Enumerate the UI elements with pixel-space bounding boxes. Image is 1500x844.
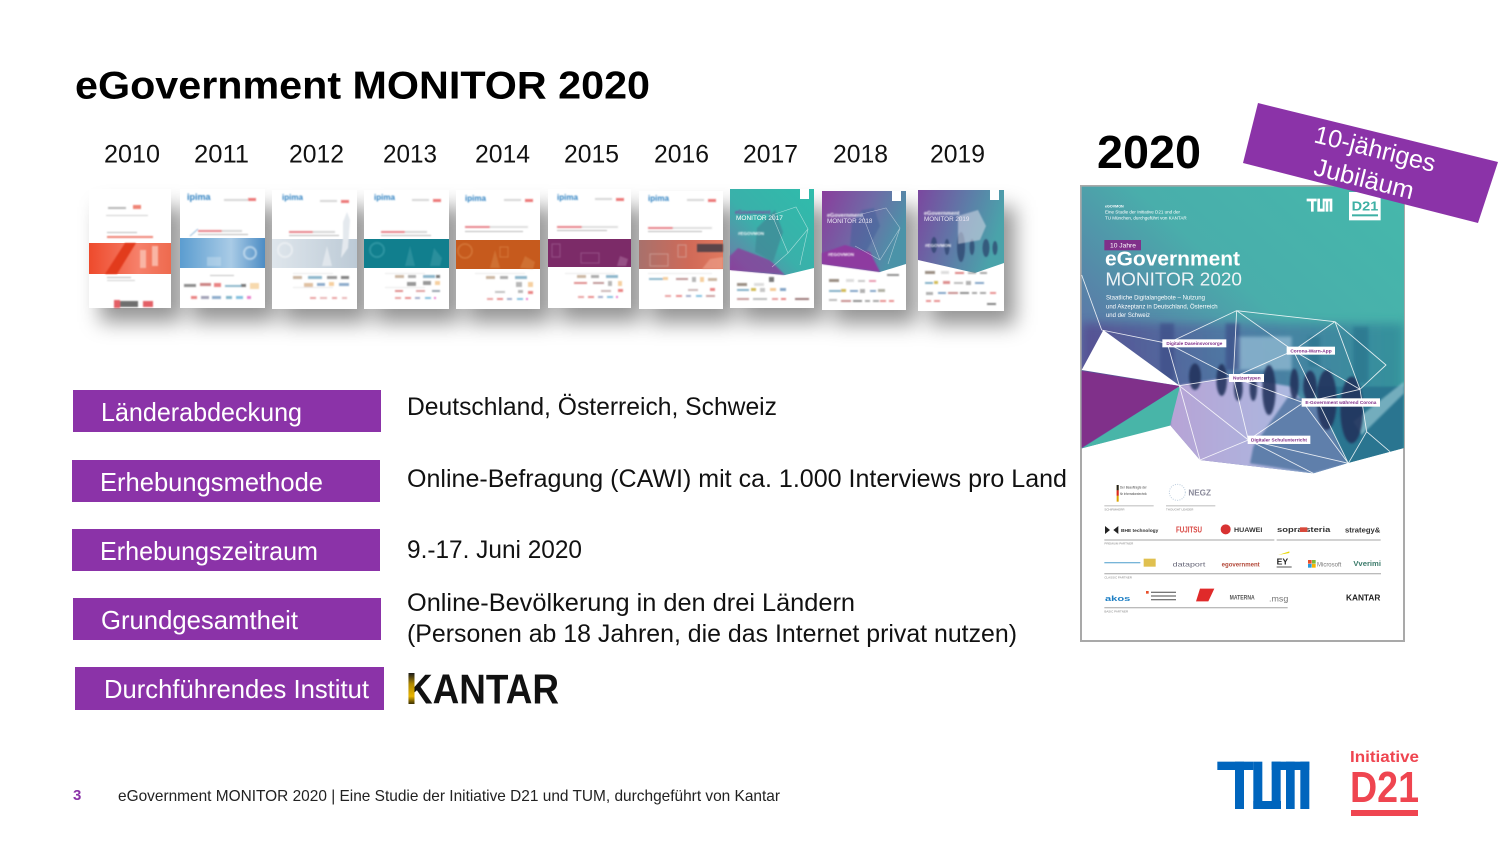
cover 2014: ipima [465, 194, 486, 203]
cover partner logos: strategy& [1345, 525, 1381, 534]
Initiative D21 logo: Initiative [1350, 749, 1419, 766]
cover topic labels: Digitaler Schulunterricht [1251, 437, 1308, 442]
footer text: eGovernment MONITOR 2020 | Eine Studie der Initiative D21 und TUM, durchgeführt von Kantar [118, 788, 781, 805]
cover 2010 [89, 189, 171, 308]
cover partner logos: PREMIUM PARTNER [1104, 541, 1134, 545]
cover topic labels [1162, 339, 1380, 444]
cover top text: und der Schweiz [1106, 312, 1150, 319]
cover 2012: ipima [282, 193, 303, 202]
cover 2018 [822, 191, 906, 310]
cover 2013: ipima [374, 193, 395, 202]
cover partner logos [1104, 484, 1381, 614]
cover partner logos: .msg [1269, 594, 1288, 603]
cover 2017: MONITOR 2017 [736, 215, 783, 222]
year labels [104, 140, 985, 168]
cover 2019: #EGOVMON [925, 243, 951, 248]
row: Grundgesamtheit [73, 589, 1017, 648]
large cover 2020 [1081, 186, 1404, 641]
cover top text: eGovernment [1105, 249, 1240, 271]
cover 2015: ipima [557, 193, 578, 202]
cover 2019: eGovernment [924, 211, 960, 217]
row: Durchführendes Institut [75, 666, 559, 712]
cover D21 logo [1349, 192, 1381, 220]
row: Länderabdeckung: Länderabdeckung [101, 397, 302, 427]
cover top text: 10 Jahre [1110, 242, 1136, 249]
cover top text: Staatliche Digitalangebote – Nutzung [1106, 295, 1205, 302]
cover topic labels: Corona-Warn-App [1290, 348, 1332, 353]
cover 2019: MONITOR 2019 [924, 216, 970, 223]
TUM logo [1217, 762, 1309, 809]
cover partner logos: Der Beauftragte der [1120, 486, 1147, 490]
cover partner logos: CLASSIC PARTNER [1104, 576, 1133, 580]
heading: 2020: 2020 [1097, 126, 1201, 178]
cover 2013 [364, 190, 449, 309]
cover partner logos: egovernment [1222, 561, 1260, 568]
cover top text: und Akzeptanz in Deutschland, Österreich [1106, 302, 1218, 310]
year labels: 2011 [194, 140, 249, 168]
Initiative D21 logo: D21 [1350, 763, 1419, 812]
row: Erhebungsmethode: Erhebungsmethode [100, 467, 323, 497]
cover partner logos: BASIC PARTNER [1104, 610, 1129, 614]
row: Erhebungszeitraum: Erhebungszeitraum [100, 536, 318, 566]
anniversary badge: 10-jähriges [1311, 121, 1438, 178]
cover topic labels: Nutzertypen [1233, 376, 1261, 381]
cover top text [1104, 205, 1242, 319]
year labels: 2015 [564, 140, 619, 168]
cover partner logos: Microsoft [1317, 561, 1341, 568]
cover 2011: ipima [187, 192, 212, 202]
row: Länderabdeckung: Deutschland, Österreich, Schweiz [407, 393, 777, 421]
row: Erhebungsmethode: Online-Befragung (CAWI) mit ca. 1.000 Interviews pro Land [407, 465, 1067, 493]
row: Grundgesamtheit: Grundgesamtheit [101, 605, 299, 635]
anniversary badge [1243, 103, 1498, 223]
year labels: 2019 [930, 140, 985, 168]
year labels: 2012 [289, 140, 344, 168]
cover 2012 [272, 190, 357, 309]
cover top text: Eine Studie der Initiative D21 und der [1105, 210, 1181, 215]
cover 2019 [918, 190, 1004, 311]
cover partner logos: dataport [1173, 562, 1206, 569]
cover network lines [1082, 275, 1390, 473]
cover partner logos: KANTAR [1346, 593, 1381, 603]
cover partner logos: NEGZ [1188, 488, 1211, 497]
year labels: 2017 [743, 140, 798, 168]
cover white triangle [1082, 330, 1180, 386]
cover partner logos: THOUGHT LEADER [1166, 507, 1194, 511]
row: Länderabdeckung [73, 390, 777, 432]
row: Grundgesamtheit: (Personen ab 18 Jahren, die das Internet privat nutzen) [407, 620, 1017, 648]
cover 2015 [548, 189, 631, 308]
cover partner logos: Vverimi [1353, 559, 1381, 568]
cover 2018: #EGOVMON [828, 252, 854, 257]
year labels: 2013 [383, 140, 437, 168]
cover 2016: ipima [648, 194, 669, 203]
cover partner logos: für Informationstechnik [1120, 492, 1147, 496]
year labels: 2010 [104, 140, 160, 168]
page number: 3 [73, 787, 81, 804]
anniversary badge: Jubiläum [1311, 153, 1417, 205]
row: Durchführendes Institut: KANTAR [406, 666, 559, 712]
cover partner logos: akos [1105, 594, 1130, 603]
row: Erhebungszeitraum: 9.-17. Juni 2020 [407, 536, 582, 564]
title: eGovernment MONITOR 2020 [75, 64, 650, 108]
cover 2017: #EGOVMON [738, 231, 764, 236]
cover top text: eGOVMON [1105, 205, 1124, 209]
cover partner logos: FUJITSU [1176, 524, 1202, 534]
cover TUM logo [1307, 199, 1332, 212]
cover partner logos: SCHIRMHERR [1104, 507, 1125, 511]
cover top text: MONITOR 2020 [1105, 269, 1242, 290]
cover D21 logo: D21 [1352, 200, 1378, 214]
cover 2018: eGovernment [827, 213, 863, 219]
cover teal triangle [1082, 386, 1180, 448]
cover 2017: eGovernment [735, 210, 771, 216]
year labels: 2014 [475, 140, 530, 168]
year labels: 2016 [654, 140, 709, 168]
row: Durchführendes Institut: Durchführendes Institut [104, 674, 370, 704]
cover topic labels: Digitale Daseinsvorsorge [1166, 341, 1223, 346]
cover 2011 [180, 189, 265, 308]
cover purple triangle [1082, 371, 1180, 448]
row: Erhebungszeitraum [72, 529, 582, 571]
year labels: 2018 [833, 140, 888, 168]
Initiative D21 logo [1350, 749, 1419, 816]
cover 2017 [730, 189, 814, 308]
cover partner logos: EY [1277, 556, 1288, 566]
cover shadows [100, 207, 1015, 325]
cover partner logos: sopra steria [1277, 527, 1330, 534]
row: Erhebungsmethode [72, 460, 1067, 502]
cover 2018: MONITOR 2018 [827, 218, 873, 225]
cover partner logos: MATERNA [1230, 596, 1255, 602]
row: Grundgesamtheit: Online-Bevölkerung in den drei Ländern [407, 589, 855, 617]
cover topic labels: E-Government während Corona [1305, 400, 1377, 405]
cover 2014 [456, 190, 540, 309]
cover 2016 [639, 191, 723, 309]
cover top text: TU München, durchgeführt von KANTAR [1105, 216, 1187, 221]
cover partner logos: HUAWEI [1234, 527, 1262, 534]
cover partner logos: BHE technology [1121, 528, 1159, 534]
